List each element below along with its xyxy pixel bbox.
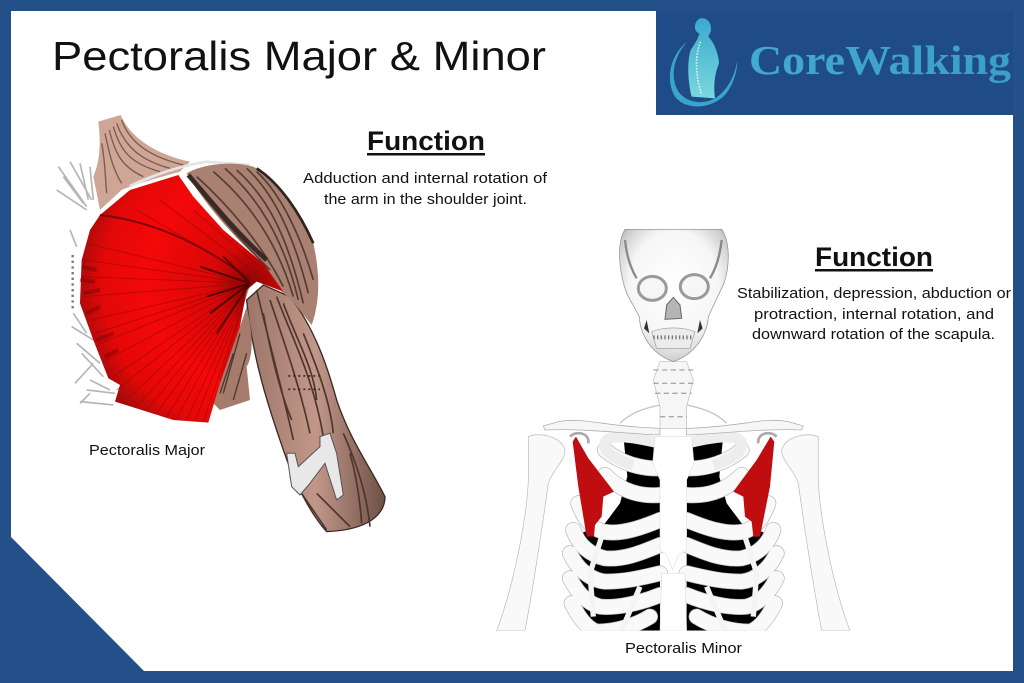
- title: Pectoralis Major & Minor: [52, 33, 546, 79]
- text: function of pectoralis major: the arm in the shoulder joint.: [324, 192, 527, 208]
- deltoid: [187, 164, 318, 325]
- coracoid ring: [570, 433, 588, 443]
- text: function of pectoralis minor: protraction, internal rotation, and: [754, 307, 994, 323]
- neck vertebrae: [653, 362, 693, 428]
- label: Pectoralis Minor: Pectoralis Minor: [625, 641, 742, 657]
- icon: spine silhouette logo: [670, 18, 737, 106]
- lower chest tab muscle: [210, 307, 252, 410]
- humerus: [497, 435, 565, 631]
- bicep lettering marks: [288, 376, 322, 389]
- tendon aponeurosis: [287, 433, 343, 500]
- heading: function of minor: Function: [815, 242, 933, 272]
- trapezius arc: [620, 405, 660, 423]
- mirrored rib cage half: [687, 405, 850, 632]
- skull: [620, 229, 728, 362]
- grey ribs and sternum sketch: [57, 162, 115, 405]
- red pectoralis major muscle: [80, 175, 283, 423]
- rib cage half: [497, 405, 660, 632]
- label: Pectoralis Major: Pectoralis Major: [89, 443, 205, 459]
- text: function of pectoralis major: Adduction and internal rotation of: [303, 171, 548, 187]
- clavicle highlight: [130, 162, 250, 186]
- text: function of pectoralis minor: Stabilization, depression, abduction or: [737, 286, 1011, 302]
- illustration: pectoralis major on arm: [57, 115, 385, 532]
- clavicle: [543, 420, 660, 435]
- text: function of pectoralis minor: [737, 286, 1011, 343]
- pectoralis minor left: [573, 437, 614, 537]
- text: function of pectoralis minor: downward rotation of the scapula.: [752, 327, 995, 343]
- sternum: [653, 437, 694, 631]
- logo panel: CoreWalking: [656, 11, 1013, 115]
- lateral rib crossing: [590, 537, 640, 631]
- neck strap muscle: [93, 115, 190, 210]
- first rib ring: [605, 437, 658, 465]
- text: function of pectoralis major: [303, 171, 548, 208]
- heading: function of major: Function: [367, 126, 485, 156]
- logo wordmark: CoreWalking: [749, 37, 1012, 83]
- pectoralis minor right: [733, 437, 774, 537]
- illustration: skeleton with pectoralis minor: [497, 229, 850, 632]
- forearm and biceps: [247, 285, 385, 532]
